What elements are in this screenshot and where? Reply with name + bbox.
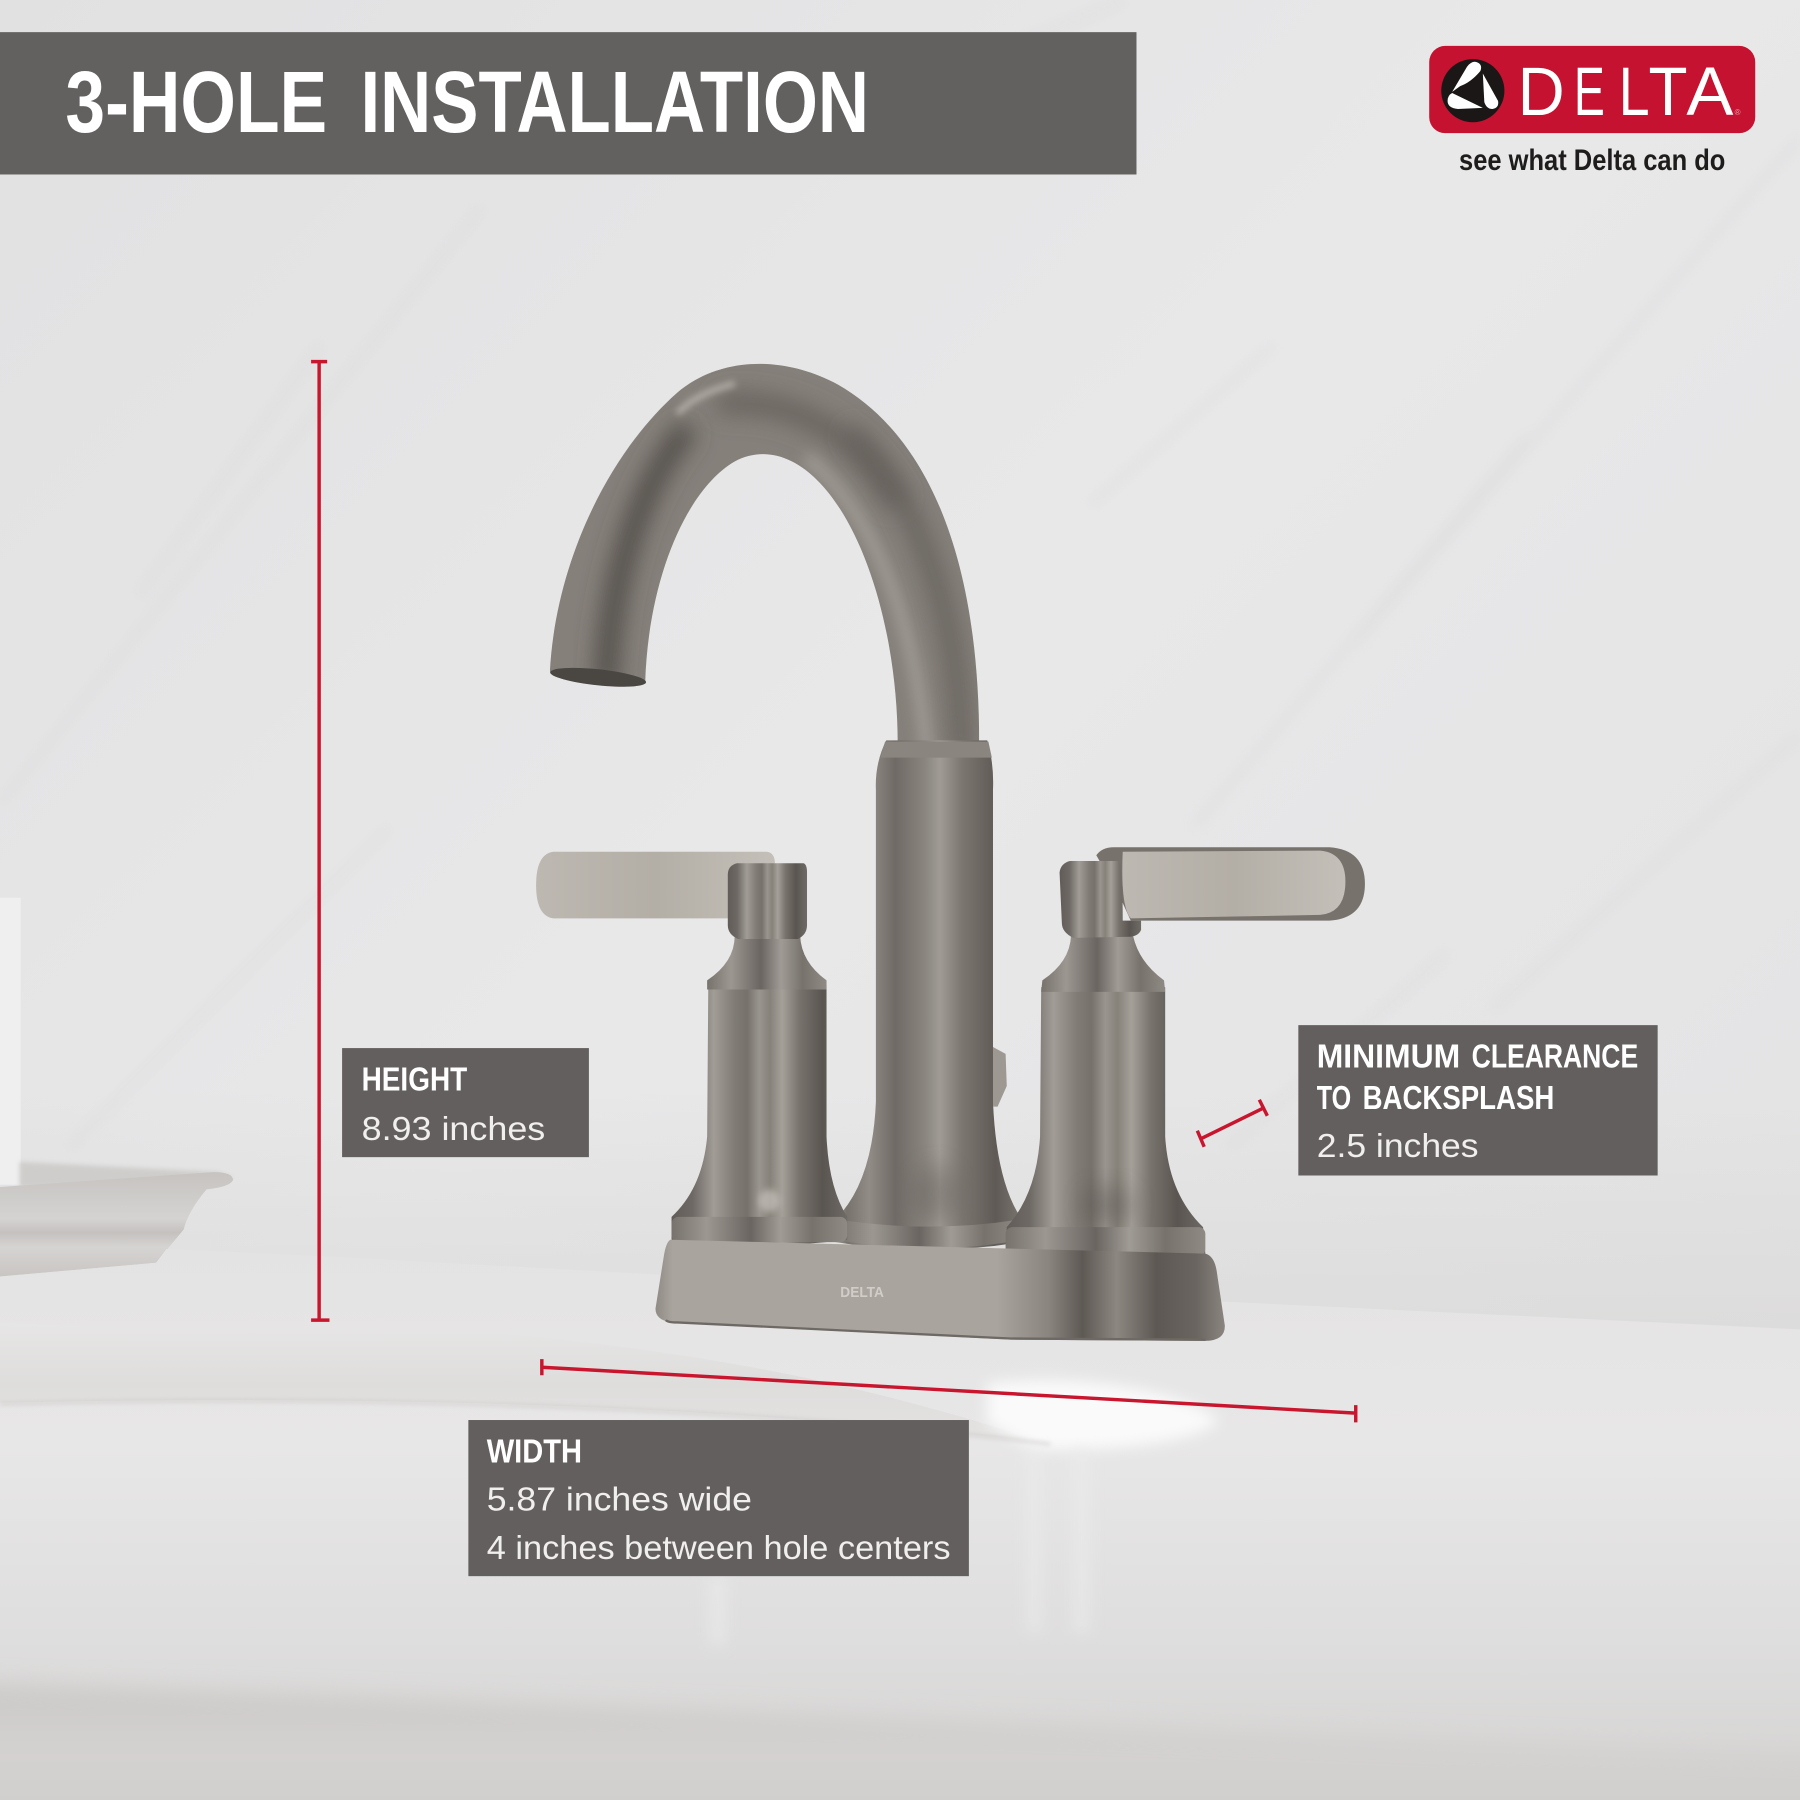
callout: width: 4 inches between hole centers: [487, 1530, 951, 1567]
width dimension line: [542, 1359, 1356, 1422]
background object: soap dish: [0, 1162, 233, 1277]
callout: minimum clearance: 2.5 inches: [1317, 1128, 1479, 1165]
logo wordmark: [1518, 53, 1733, 130]
faucet: right cap: [1060, 861, 1141, 938]
callout: minimum clearance: [1298, 1025, 1658, 1176]
faucet: left body highlight: [759, 1189, 779, 1212]
sink basin: [0, 1400, 1286, 1800]
height dimension line: [311, 362, 329, 1320]
faucet: right base ring: [1006, 1227, 1205, 1256]
title: INSTALLATION: [360, 54, 869, 151]
counter surface highlight: [987, 1380, 1219, 1449]
callout: width: 5.87 inches wide: [487, 1482, 752, 1519]
lower front band: [0, 1683, 1800, 1800]
registered mark: ®: [1735, 108, 1741, 117]
clearance dimension line: [1197, 1100, 1267, 1147]
background object: soap bottle: [0, 898, 21, 1185]
title: [65, 54, 869, 151]
callout: width: WIDTH: [487, 1434, 582, 1471]
faucet: column foot ring: [836, 1219, 1022, 1248]
callout: height: HEIGHT: [362, 1062, 467, 1099]
sink rim shadow line: [0, 1401, 1050, 1444]
logo wordmark: T: [1648, 53, 1688, 130]
faucet: right body shadow: [1083, 1185, 1133, 1226]
tagline: see what Delta can do: [1459, 144, 1725, 177]
faucet: left handle body: [672, 985, 847, 1246]
faucet: left neck: [707, 936, 827, 990]
callout: width: [468, 1420, 969, 1576]
logo wordmark: L: [1619, 53, 1650, 130]
faucet: column foot shadow: [915, 1164, 956, 1224]
title: 3-HOLE: [65, 54, 327, 151]
callout: minimum clearance: TO: [1317, 1080, 1351, 1117]
logo wordmark: A: [1686, 53, 1733, 130]
logo icon: [1441, 59, 1504, 122]
faucet: column: [836, 740, 1022, 1250]
countertop: [0, 1249, 1800, 1800]
faucet: column collar: [880, 742, 992, 758]
callout: minimum clearance: MINIMUM: [1317, 1039, 1460, 1076]
faucet: left cap: [728, 863, 807, 939]
faucet: base plate lower rim: [666, 1320, 1205, 1340]
faucet: [536, 350, 1365, 1341]
callout: height: [342, 1048, 589, 1157]
faucet: base plate: [655, 1240, 1225, 1341]
faucet: left lever: [536, 852, 775, 918]
faucet: right handle body: [1006, 987, 1205, 1259]
title banner: [0, 32, 1136, 174]
faucet: right neck: [1041, 936, 1165, 992]
logo wordmark: D: [1518, 53, 1565, 130]
Delta logo: [1429, 46, 1755, 133]
faucet: right lever edge: [1096, 847, 1365, 921]
faucet: left base ring: [672, 1217, 847, 1242]
faucet: right lever face: [1122, 851, 1345, 918]
callout: height: 8.93 inches: [362, 1111, 545, 1148]
faucet: base logo: DELTA: [840, 1284, 884, 1301]
callout: minimum clearance: BACKSPLASH: [1363, 1080, 1554, 1117]
callout: minimum clearance: CLEARANCE: [1472, 1039, 1638, 1076]
faucet: aerator: [549, 664, 647, 690]
faucet: pop-up drain lever: [993, 1047, 1007, 1107]
counter front edge: [0, 1322, 1056, 1446]
logo wordmark: E: [1574, 53, 1605, 130]
faucet reflection: [709, 1449, 1089, 1645]
faucet: spout: [550, 364, 980, 740]
